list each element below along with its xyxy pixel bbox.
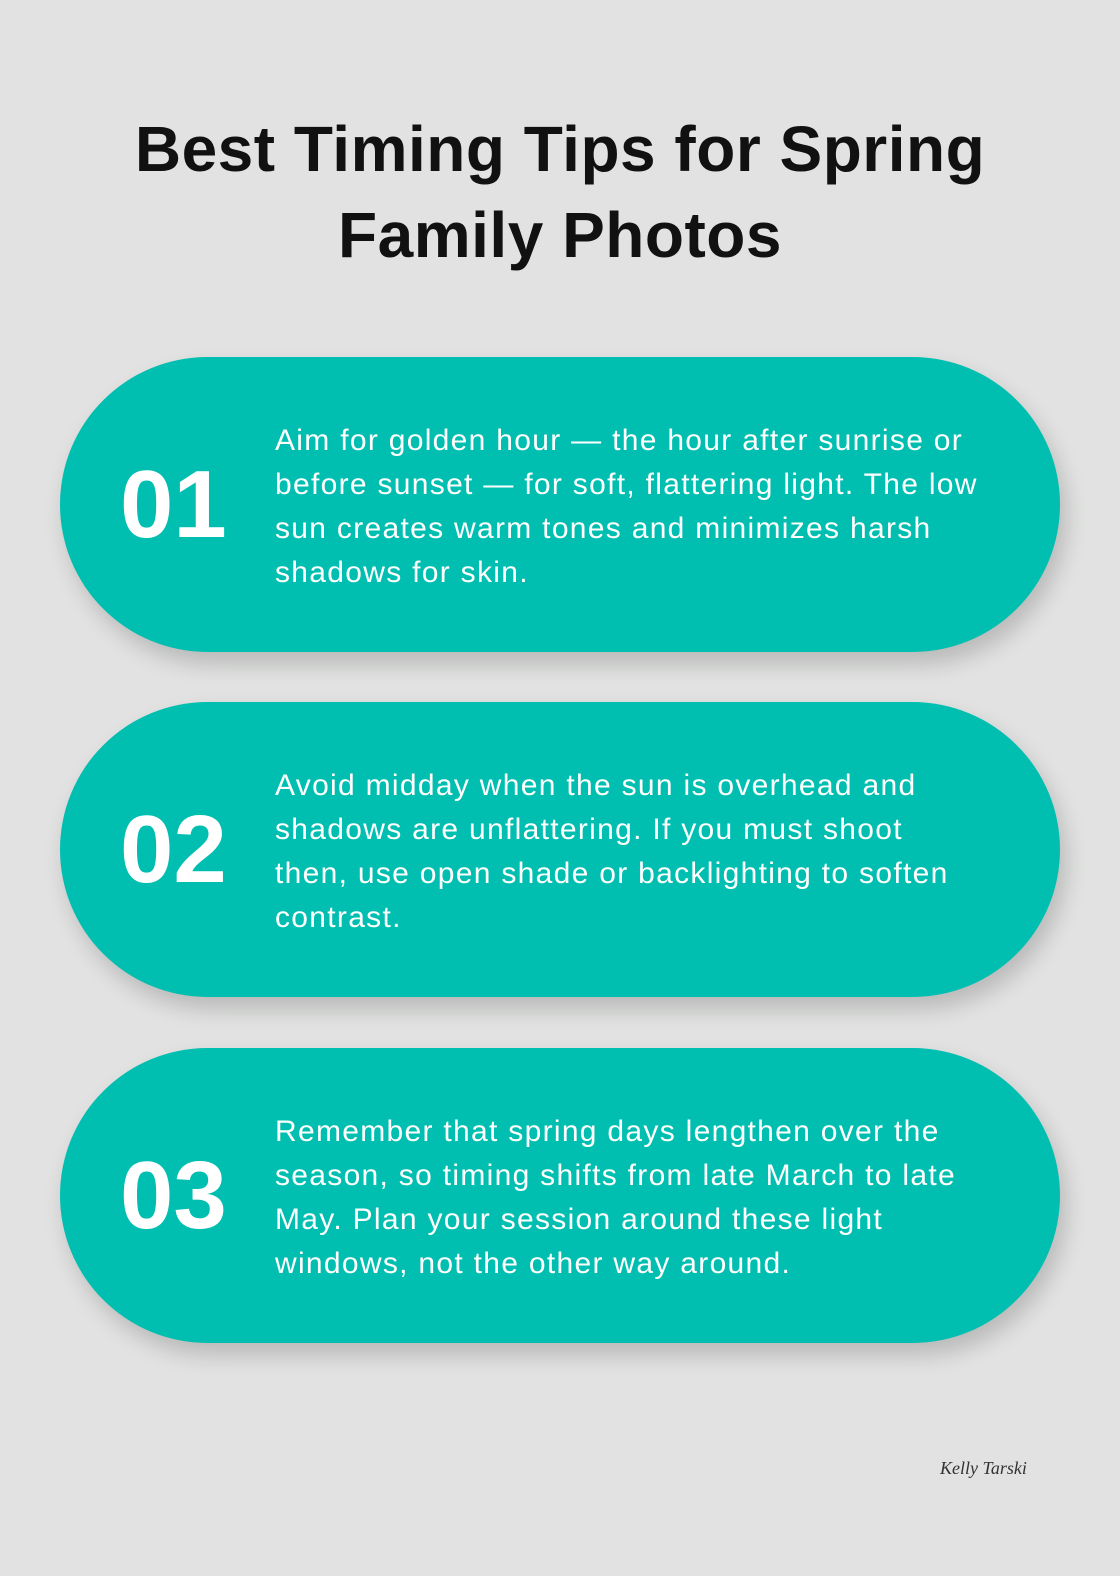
text: tip 02: Avoid midday when the sun is overhead and	[275, 768, 916, 802]
text: tip 02	[275, 768, 949, 934]
title: Best Timing Tips for Spring	[135, 113, 985, 185]
panel: tip 02	[60, 702, 1060, 997]
text: tip 01: shadows for skin.	[275, 556, 529, 588]
panel: tip 03	[60, 1048, 1060, 1343]
number 02: 02	[120, 796, 227, 903]
text: tip 02: shadows are unflattering. If you must shoot	[275, 812, 903, 846]
text: tip 03: May. Plan your session around these light	[275, 1202, 883, 1236]
logo signature: Kelly Tarski	[940, 1458, 1027, 1478]
text: tip 02: contrast.	[275, 900, 402, 934]
number 03: 03	[120, 1142, 227, 1249]
text: tip 01: before sunset — for soft, flattering light. The low	[275, 468, 978, 500]
text: tip 03: windows, not the other way around.	[275, 1246, 791, 1280]
text: tip 03	[275, 1114, 956, 1280]
title	[135, 113, 985, 271]
text: tip 01: Aim for golden hour — the hour after sunrise or	[275, 424, 963, 456]
number 01: 01	[120, 451, 227, 558]
text: tip 02: then, use open shade or backlighting to soften	[275, 856, 949, 890]
text: tip 03: Remember that spring days lengthen over the	[275, 1114, 940, 1148]
panel: tip 01	[60, 357, 1060, 652]
text: tip 01: sun creates warm tones and minimizes harsh	[275, 512, 932, 544]
text: tip 01	[275, 424, 978, 588]
text: tip 03: season, so timing shifts from late March to late	[275, 1158, 956, 1192]
title: Family Photos	[338, 199, 782, 271]
